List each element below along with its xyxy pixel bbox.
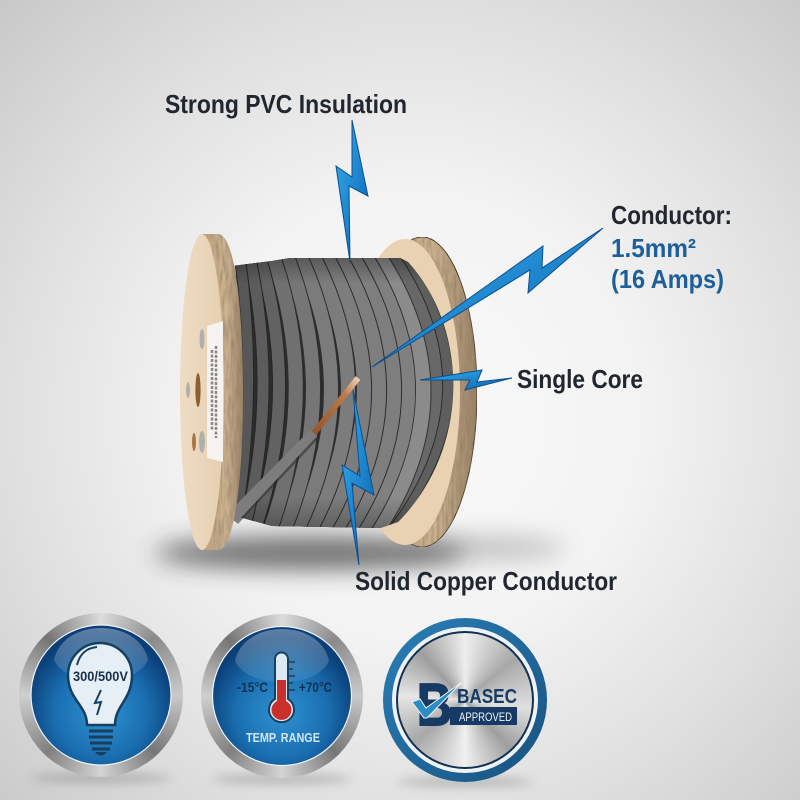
free cable end	[228, 378, 358, 524]
bolt: conductor pointer	[372, 228, 603, 367]
BASEC logo: BASEC	[457, 686, 517, 708]
cable reel	[180, 234, 477, 550]
BASEC logo	[412, 672, 517, 738]
temp range caption: TEMP. RANGE	[246, 730, 320, 745]
badge: BASEC approved	[383, 618, 547, 787]
label: conductor: Conductor:	[611, 200, 732, 230]
label: single core: Single Core	[517, 364, 643, 394]
bolt: single core pointer	[420, 370, 512, 390]
spool floor shadow	[155, 536, 565, 570]
label: solid copper conductor: Solid Copper Conductor	[355, 566, 617, 596]
icon: thermometer	[269, 653, 295, 722]
flange label	[207, 321, 223, 462]
icon: light bulb	[68, 643, 132, 756]
voltage text: 300/500V	[73, 668, 129, 684]
BASEC logo: APPROVED	[459, 712, 512, 724]
bolt: PVC insulation pointer	[336, 120, 368, 262]
badge: temperature range	[201, 614, 363, 784]
label: current rating: (16 Amps)	[611, 264, 724, 294]
maximum temperature: +70°C	[299, 679, 332, 695]
cable windings	[232, 254, 467, 530]
label: strong PVC insulation: Strong PVC Insulation	[165, 89, 407, 119]
bolt: copper conductor pointer	[342, 390, 374, 565]
flange holes	[186, 329, 205, 453]
minimum temperature: -15°C	[237, 679, 268, 695]
left flange	[180, 234, 243, 550]
BASEC logo: B	[417, 672, 452, 738]
right flange	[350, 237, 477, 547]
label: conductor size: 1.5mm²	[611, 233, 696, 263]
badge: voltage	[19, 613, 183, 783]
